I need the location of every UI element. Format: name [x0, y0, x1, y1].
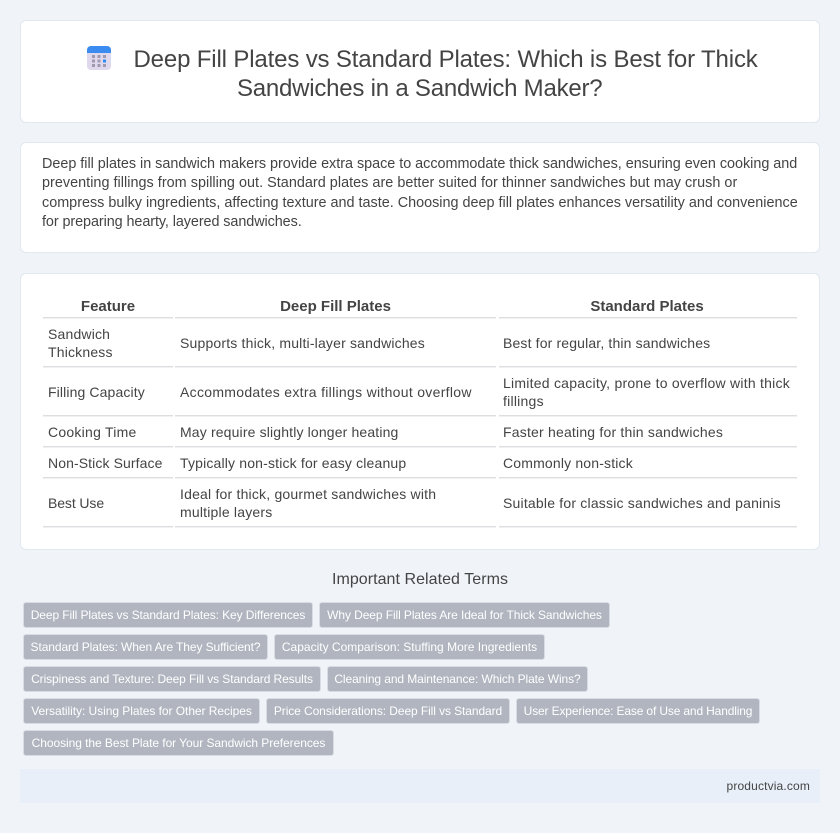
row: sandwich thickness: Sandwich [48, 326, 110, 342]
intro text: preventing fillings from spilling out. Standard plates are better suited for thinner sandwiches but may crush or [42, 175, 737, 191]
row: sandwich thickness: Supports thick, multi-layer sandwiches [180, 335, 425, 351]
row: cooking time: Faster heating for thin sandwiches [503, 424, 723, 440]
intro text [42, 156, 798, 230]
tag [319, 602, 610, 628]
row: best use: multiple layers [180, 504, 272, 520]
tag [23, 666, 321, 692]
row: non-stick surface: Typically non-stick for easy cleanup [180, 455, 406, 471]
tag: Standard Plates: When Are They Sufficient? [31, 640, 260, 654]
tag [23, 602, 313, 628]
tag: Why Deep Fill Plates Are Ideal for Thick Sandwiches [327, 608, 602, 622]
table header: Feature [81, 298, 135, 315]
tag: Choosing the Best Plate for Your Sandwich Preferences [32, 736, 325, 750]
row: filling capacity [48, 375, 790, 409]
tag [23, 634, 268, 660]
tag [266, 698, 510, 724]
table header: Standard Plates [590, 298, 704, 315]
intro text: for preparing hearty, layered sandwiches. [42, 214, 302, 230]
row: sandwich thickness: Thickness [48, 344, 113, 360]
row: best use [48, 486, 781, 520]
row: sandwich thickness: Best for regular, thin sandwiches [503, 335, 710, 351]
row: cooking time: May require slightly longer heating [180, 424, 398, 440]
footer source: productvia.com [727, 779, 810, 793]
tag: Crispiness and Texture: Deep Fill vs Standard Results [31, 672, 313, 686]
tag [516, 698, 760, 724]
tag [327, 666, 588, 692]
tag [274, 634, 545, 660]
intro text: compress bulky ingredients, affecting texture and taste. Choosing deep fill plates enhances versatility and convenience [42, 194, 798, 210]
title text: Sandwiches in a Sandwich Maker? [237, 74, 602, 102]
table header [81, 298, 704, 315]
row: filling capacity: fillings [503, 393, 544, 409]
row: filling capacity: Filling Capacity [48, 384, 145, 400]
tag: Cleaning and Maintenance: Which Plate Wins? [334, 672, 581, 686]
footer bar [20, 769, 820, 803]
row: cooking time [48, 424, 723, 440]
comparison table [43, 298, 797, 528]
tag [23, 698, 260, 724]
row: best use: Ideal for thick, gourmet sandwiches with [180, 486, 436, 502]
row: non-stick surface: Commonly non-stick [503, 455, 633, 471]
tag: User Experience: Ease of Use and Handling [524, 704, 752, 718]
tag: Price Considerations: Deep Fill vs Standard [274, 704, 502, 718]
row: filling capacity: Accommodates extra fillings without overflow [180, 384, 472, 400]
row: non-stick surface: Non-Stick Surface [48, 455, 163, 471]
title text [134, 46, 758, 102]
table header: Deep Fill Plates [280, 298, 391, 315]
row: non-stick surface [48, 455, 633, 471]
tag: Capacity Comparison: Stuffing More Ingredients [282, 640, 537, 654]
title text: Deep Fill Plates vs Standard Plates: Which is Best for Thick [134, 46, 758, 72]
related term tags [23, 602, 760, 756]
row: best use: Suitable for classic sandwiches and paninis [503, 495, 781, 511]
tag: Versatility: Using Plates for Other Recipes [31, 704, 252, 718]
panel: comparison table [20, 273, 820, 550]
tag [23, 730, 334, 756]
row: sandwich thickness [48, 326, 710, 360]
row: best use: Best Use [48, 495, 104, 511]
row: cooking time: Cooking Time [48, 424, 137, 440]
icon: calendar [87, 46, 111, 70]
panel: title [20, 20, 820, 123]
row: filling capacity: Limited capacity, prone to overflow with thick [503, 375, 790, 391]
tag: Deep Fill Plates vs Standard Plates: Key Differences [31, 608, 305, 622]
panel: introduction [20, 142, 820, 253]
heading: important related terms: Important Related Terms [332, 571, 508, 588]
intro text: Deep fill plates in sandwich makers provide extra space to accommodate thick sandwiches, ensuring even cooking and [42, 156, 797, 172]
